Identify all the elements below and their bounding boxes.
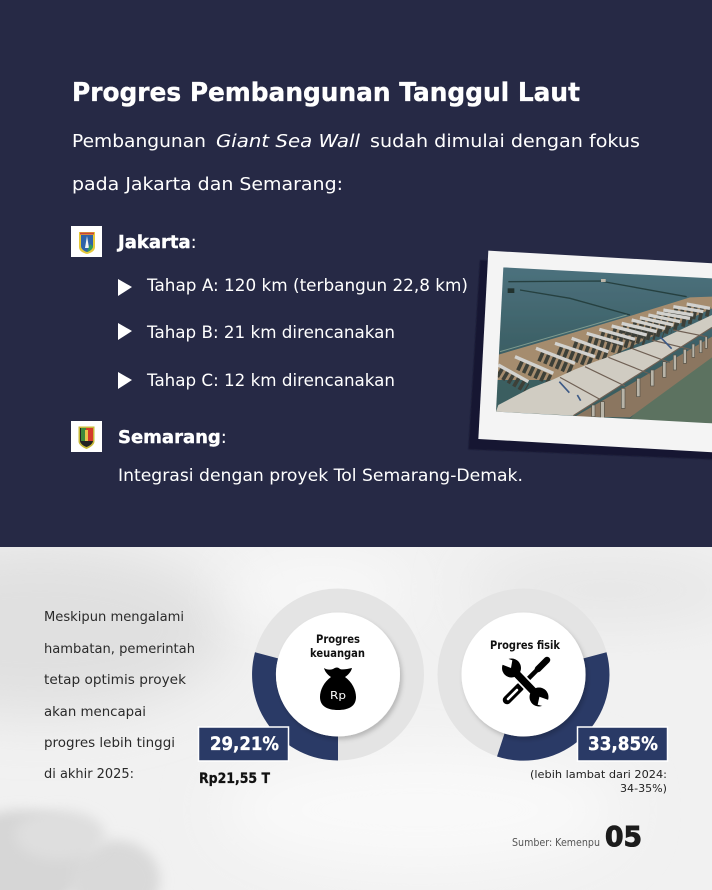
icon: money bag [320,668,356,710]
chart: financial progress donut [198,600,412,787]
bullet: Tahap B [118,323,132,340]
Jakarta stages list [118,276,468,390]
note: slower than 2024: (lebih lambat dari 2024: [530,768,667,781]
badge: 29,21%: 29,21% [210,734,279,755]
intro paragraph: Giant Sea Wall [216,131,360,152]
badge: 33,85% [578,727,668,761]
Semarang description: Integrasi dengan proyek Tol Semarang-Demak. [118,466,523,485]
label: Progres keuangan: keuangan [310,646,365,660]
panel: dark header background [0,0,712,547]
value: Rp21,55 T: Rp21,55 T [199,771,270,787]
photo: sea wall construction in a tilted white frame [468,251,712,460]
title: Progres Pembangunan Tanggul Laut [72,78,580,108]
panel: lower cloudy background [0,545,712,890]
text block: optimism statement: akan mencapai [44,704,146,720]
text: Tahap C: Tahap C: 12 km direncanakan [146,371,395,390]
text block: optimism statement [44,609,195,782]
text: Tahap A: Tahap A: 120 km (terbangun 22,8 km) [146,276,468,295]
page number: 05 [605,820,642,853]
note: slower than 2024: 34-35%) [620,782,667,795]
intro paragraph: pada Jakarta dan Semarang: [72,174,343,195]
note: slower than 2024 [530,768,667,795]
label: Progres keuangan: Progres [316,632,360,646]
text block: optimism statement: hambatan, pemerintah [44,641,195,657]
icon: Semarang emblem [71,421,102,452]
bullet: Tahap A [118,279,132,296]
source credit: Sumber: Kemenpu [512,837,600,849]
text block: optimism statement: progres lebih tinggi [44,735,175,751]
icon: wrench and screwdriver [498,654,553,711]
chart: physical progress donut [450,600,668,795]
text block: optimism statement: tetap optimis proyek [44,672,186,688]
badge: 29,21% [198,727,288,761]
label: Progres keuangan [310,632,365,660]
label: Progres fisik: Progres fisik [490,638,560,652]
intro paragraph [72,131,640,195]
Jakarta heading: Jakarta: [116,232,197,253]
icon: Jakarta emblem [71,226,102,257]
Semarang heading: Semarang: [118,427,227,448]
badge: 33,85%: 33,85% [588,734,658,755]
intro paragraph: sudah dimulai dengan fokus [370,131,640,152]
text: Tahap B: Tahap B: 21 km direncanakan [146,323,395,342]
icon: money bag: Rp [330,689,346,702]
text block: optimism statement: Meskipun mengalami [44,609,184,625]
bullet: Tahap C [118,372,132,389]
text block: optimism statement: di akhir 2025: [44,766,134,782]
intro paragraph: Pembangunan [72,131,206,152]
